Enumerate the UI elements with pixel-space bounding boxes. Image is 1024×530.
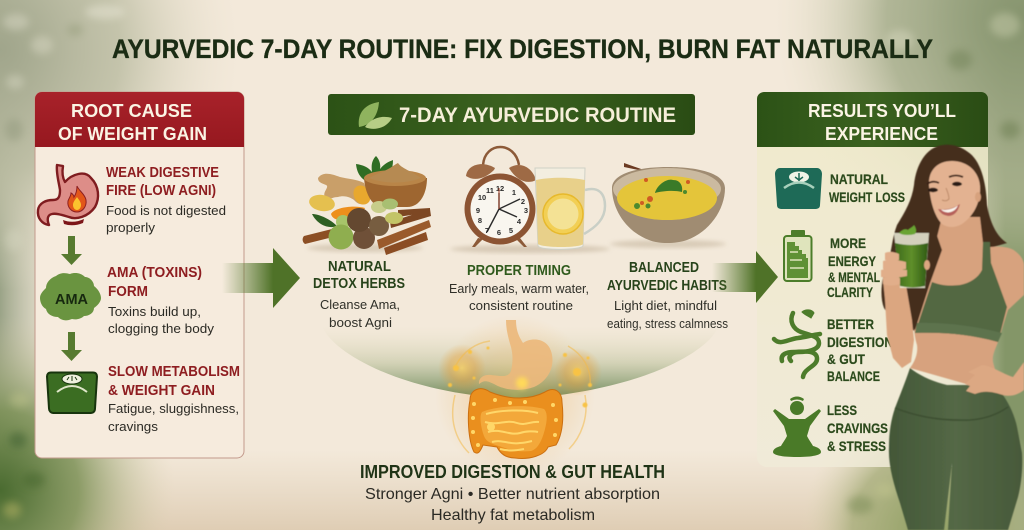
sports bra — [915, 242, 1007, 342]
benefit: more energy and mental clarity: MORE — [830, 235, 866, 251]
panel: root cause of weight gain — [35, 92, 244, 458]
cause 1 text: WEAK DIGESTIVE — [106, 165, 219, 181]
green dome behind digestive system — [322, 326, 718, 399]
illustration: woman with green smoothie — [881, 145, 1024, 530]
improved digestion text: Stronger Agni • Better nutrient absorption — [365, 486, 660, 503]
illustration: alarm clock and lemon water: 4 — [517, 217, 522, 226]
icon: AMA toxin cloud — [40, 273, 101, 320]
icon: AMA toxin cloud: AMA — [55, 292, 89, 308]
benefit: more energy and mental clarity: ENERGY — [828, 253, 877, 269]
illustration: alarm clock and lemon water: 5 — [509, 226, 513, 235]
waistband fold — [895, 407, 1008, 420]
benefit: more energy and mental clarity: & MENTAL — [828, 269, 880, 285]
routine step 2 text: PROPER TIMING — [467, 263, 571, 279]
routine step 1 text: boost Agni — [329, 315, 392, 330]
ear — [975, 192, 981, 202]
title: AYURVEDIC 7-DAY ROUTINE: FIX DIGESTION, BURN FAT NATURALLY — [112, 34, 933, 64]
banner: 7-day ayurvedic routine — [328, 94, 695, 135]
benefit: natural weight loss: NATURAL — [830, 171, 888, 187]
benefit: better digestion and gut balance: DIGESTION — [827, 334, 893, 350]
cause 3 text — [108, 364, 240, 434]
benefit: less cravings and stress — [827, 402, 888, 454]
cause 1 text: properly — [106, 220, 156, 235]
illustration: detox herbs — [303, 156, 431, 255]
routine step 1 text: DETOX HERBS — [313, 276, 405, 292]
arrow: down — [61, 332, 82, 361]
routine step 1 text — [313, 259, 405, 330]
cause 3 text: cravings — [108, 419, 159, 434]
improved digestion text: IMPROVED DIGESTION & GUT HEALTH — [360, 462, 665, 482]
illustration: alarm clock and lemon water: 11 — [486, 186, 494, 195]
improved digestion text — [360, 462, 665, 524]
benefit: natural weight loss — [829, 171, 905, 205]
eyebrows — [927, 176, 963, 184]
panel header: root cause: ROOT CAUSE — [71, 100, 192, 121]
torso and right arm — [910, 217, 1024, 395]
routine step 3 text: BALANCED — [629, 260, 699, 276]
thumb — [924, 260, 930, 270]
panel header: results: EXPERIENCE — [825, 123, 938, 144]
illustration: bowl of kitchari — [610, 163, 726, 248]
cause 1 text: FIRE (LOW AGNI) — [106, 183, 216, 199]
hair strand over chest — [903, 207, 942, 330]
routine step 1 text: NATURAL — [328, 259, 391, 275]
routine step 2 text: Early meals, warm water, — [449, 281, 589, 296]
illustration: glowing stomach and intestines — [435, 315, 602, 475]
illustration: alarm clock and lemon water: 2 — [521, 197, 525, 206]
nose — [942, 188, 949, 201]
icon: intestines — [774, 310, 820, 377]
cause 3 text: Fatigue, sluggishness, — [108, 401, 239, 416]
smile — [938, 204, 960, 216]
benefit: more energy and mental clarity: CLARITY — [827, 284, 873, 300]
bra band — [915, 323, 1002, 342]
face — [929, 161, 980, 227]
icon: battery — [784, 230, 812, 281]
fingers on glass — [881, 252, 907, 286]
benefit: more energy and mental clarity — [827, 235, 880, 300]
routine step 3 text: eating, stress calmness — [607, 316, 728, 331]
routine step 1 text: Cleanse Ama, — [320, 297, 400, 312]
illustration: alarm clock and lemon water: 8 — [478, 216, 482, 225]
hand on hip — [965, 362, 1024, 396]
panel header: root cause: OF WEIGHT GAIN — [58, 123, 207, 144]
cause 2 text: Toxins build up, — [108, 304, 201, 319]
cause 3 text: & WEIGHT GAIN — [108, 383, 215, 399]
improved digestion text: Healthy fat metabolism — [431, 507, 595, 524]
cause 2 text: FORM — [108, 284, 148, 300]
illustration: alarm clock and lemon water: 6 — [497, 228, 501, 237]
illustration: alarm clock and lemon water: 12 — [496, 184, 504, 193]
illustration: alarm clock and lemon water: 1 — [512, 188, 516, 197]
benefit: better digestion and gut balance: BALANCE — [827, 368, 880, 384]
benefit: natural weight loss: WEIGHT LOSS — [829, 189, 905, 205]
routine step 3 text: AYURVEDIC HABITS — [607, 278, 727, 294]
routine step 3 text: Light diet, mindful — [614, 298, 717, 313]
arrow: causes to routine — [222, 248, 300, 308]
benefit: less cravings and stress: LESS — [827, 402, 857, 418]
cause 1 text — [106, 165, 226, 235]
panel header: results — [757, 92, 988, 147]
panel header: results: RESULTS YOU’LL — [808, 100, 956, 121]
benefit: better digestion and gut balance: BETTER — [827, 316, 874, 332]
glass of green juice — [894, 225, 929, 288]
illustration: alarm clock and lemon water: 7 — [485, 226, 489, 235]
panel: results you'll experience — [757, 92, 988, 467]
routine step 2 text — [449, 263, 589, 313]
illustration: alarm clock and lemon water: 9 — [476, 206, 480, 215]
banner: 7-day ayurvedic routine: 7-DAY AYURVEDIC ROUTINE — [399, 104, 676, 127]
arrow: routine to results — [712, 251, 778, 303]
icon: leaves — [359, 102, 392, 129]
routine step 3 text — [607, 260, 728, 331]
benefit: less cravings and stress: CRAVINGS — [827, 420, 888, 436]
panel header: root cause — [35, 92, 244, 147]
illustration: alarm clock and lemon water: 10 — [478, 193, 486, 202]
benefit: better digestion and gut balance: & GUT — [827, 351, 865, 367]
arm holding glass — [883, 262, 914, 368]
icon: weight scale — [47, 372, 97, 413]
routine step 2 text: consistent routine — [469, 298, 573, 313]
cause 2 text: clogging the body — [108, 321, 215, 336]
cause 3 text: SLOW METABOLISM — [108, 364, 240, 380]
icon: meditating figure — [773, 396, 821, 457]
cause 1 text: Food is not digested — [106, 203, 226, 218]
arrow: down — [61, 236, 82, 265]
eyes — [928, 182, 962, 192]
cause 2 text: AMA (TOXINS) — [107, 265, 202, 281]
cause 2 text — [107, 265, 215, 336]
hair back — [881, 145, 1007, 332]
icon: stomach with fire — [38, 165, 98, 225]
illustration: alarm clock and lemon water — [450, 147, 610, 253]
icon: weight loss scale — [775, 168, 822, 209]
benefit: better digestion and gut balance — [827, 316, 893, 384]
leggings — [889, 368, 1022, 530]
illustration: alarm clock and lemon water: 3 — [524, 206, 528, 215]
benefit: less cravings and stress: & STRESS — [827, 438, 886, 454]
